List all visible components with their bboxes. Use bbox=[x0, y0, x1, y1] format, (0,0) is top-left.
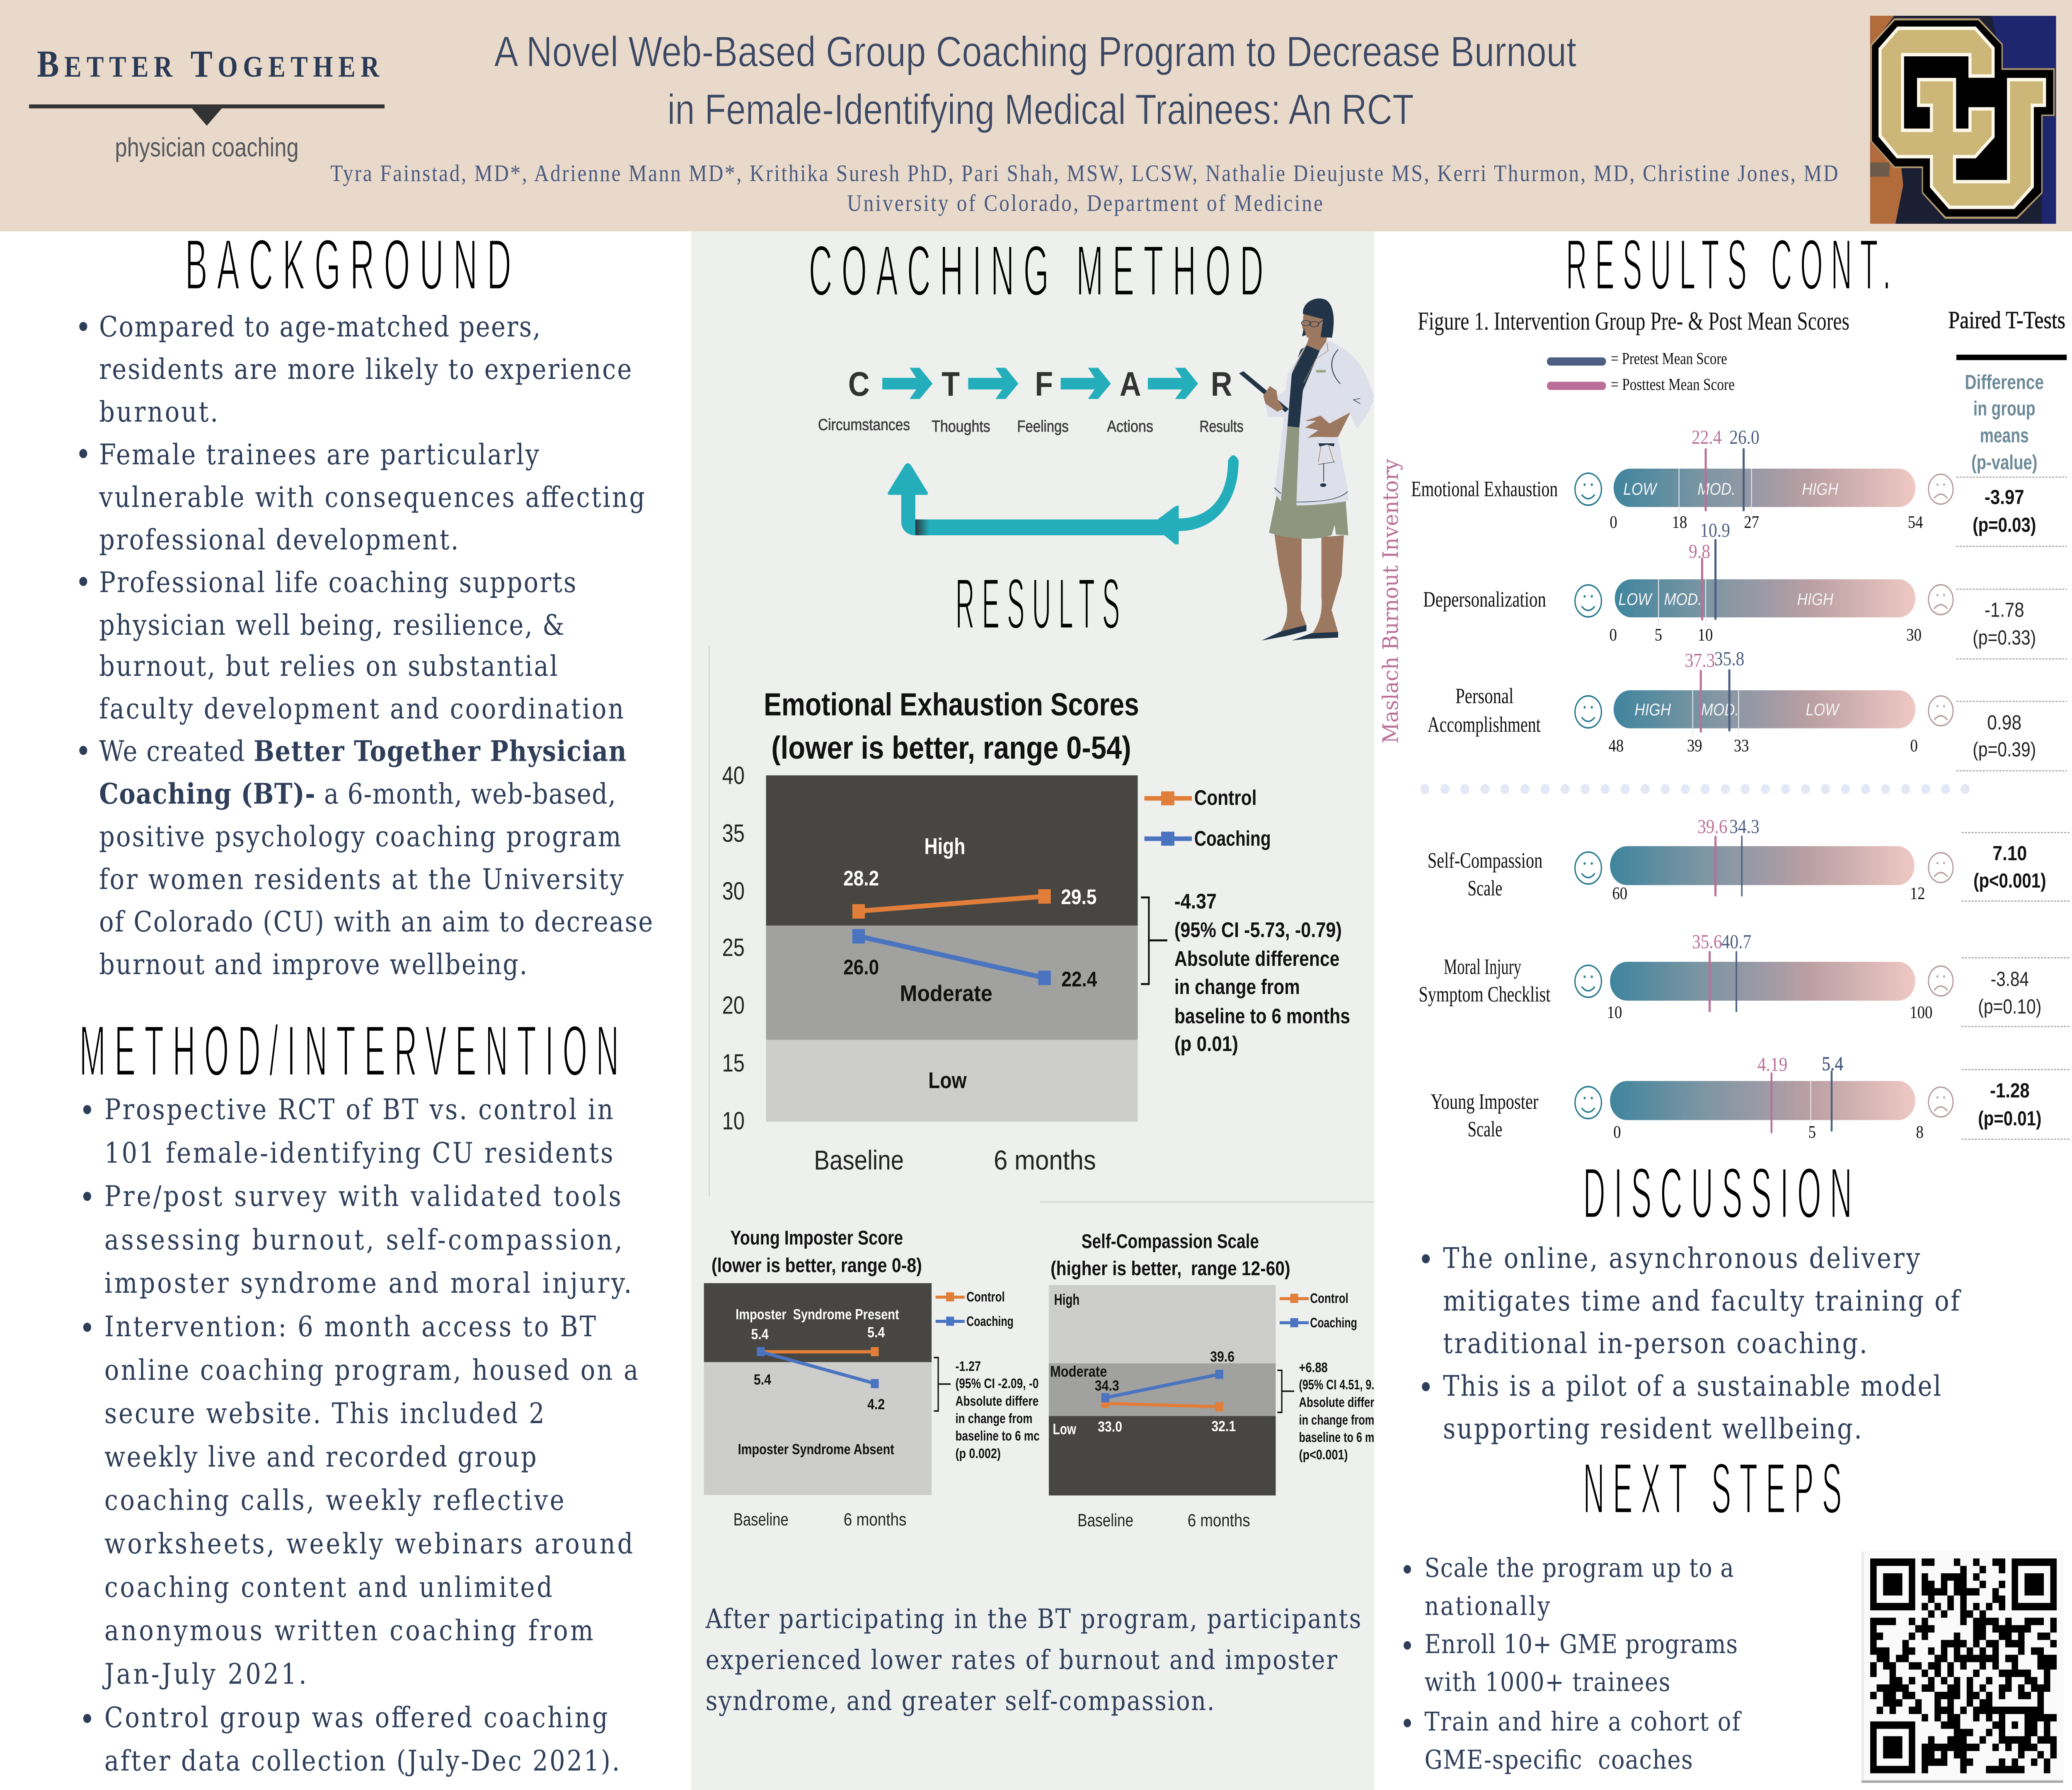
row: young imposter scale: 0 bbox=[1613, 1122, 1621, 1142]
chart title bbox=[712, 1227, 922, 1277]
panel: results cont. bbox=[1378, 225, 2071, 1142]
x axis bbox=[1077, 1511, 1250, 1530]
row: personal accomplishment: 48 bbox=[1609, 736, 1624, 755]
row: personal accomplishment: 0 bbox=[1910, 736, 1918, 755]
background bullet points: vulnerable with consequences affecting bbox=[99, 481, 645, 514]
annotation: (95% CI 4.51, 9. bbox=[1299, 1377, 1374, 1393]
background bullet points: Female trainees are particularly bbox=[99, 438, 539, 471]
annotation: baseline to 6 m bbox=[1299, 1430, 1374, 1445]
band labels: Low bbox=[928, 1067, 967, 1093]
chart title: (lower is better, range 0-8) bbox=[712, 1255, 922, 1277]
method bullet points: coaching calls, weekly reflective bbox=[104, 1484, 564, 1517]
CTFAR letters bbox=[848, 365, 1232, 403]
legend bbox=[936, 1289, 1014, 1329]
y axis: 10 bbox=[722, 1107, 745, 1135]
background bullet points: for women residents at the University bbox=[99, 863, 624, 896]
panel: results charts bbox=[704, 564, 1374, 1717]
row: self-compassion scale: (p<0.001) bbox=[1973, 869, 2046, 892]
CTFAR letters: T bbox=[942, 365, 960, 403]
panel: next steps bbox=[1404, 1449, 2063, 1783]
row: depersonalization: 10 bbox=[1698, 625, 1713, 644]
row: personal accomplishment: MOD. bbox=[1701, 701, 1739, 719]
row: depersonalization: 30 bbox=[1906, 625, 1922, 644]
row: depersonalization: -1.78 bbox=[1985, 598, 2024, 621]
legend: Coaching bbox=[1310, 1315, 1357, 1330]
icon: return loop arrow bbox=[888, 455, 1239, 544]
row: self-compassion scale: 12 bbox=[1910, 884, 1925, 903]
band labels: Imposter Syndrome Absent bbox=[738, 1441, 894, 1457]
annotation bbox=[955, 1358, 1040, 1461]
row: personal accomplishment: 35.8 bbox=[1714, 648, 1744, 670]
row: moral injury symptom checklist: 10 bbox=[1607, 1003, 1622, 1022]
CTFAR labels: Feelings bbox=[1017, 417, 1069, 435]
annotation: in change from bbox=[955, 1411, 1032, 1426]
row: self-compassion scale: 7.10 bbox=[1992, 842, 2027, 865]
row: moral injury symptom checklist: 40.7 bbox=[1721, 931, 1751, 953]
heading: method / intervention: METHOD/INTERVENTION bbox=[79, 1011, 628, 1091]
row: self-compassion scale bbox=[1428, 815, 2046, 903]
method bullet points: worksheets, weekly webinars around bbox=[104, 1528, 633, 1560]
legend: pretest and posttest: = Pretest Mean Score bbox=[1611, 349, 1727, 368]
row: young imposter scale: (p=0.01) bbox=[1978, 1107, 2041, 1130]
side label: Maslach Burnout Inventory: Maslach Burnout Inventory bbox=[1378, 459, 1403, 743]
data labels: 26.0 bbox=[843, 955, 879, 980]
bracket bbox=[934, 1357, 951, 1411]
bands bbox=[766, 775, 1138, 1122]
band labels: High bbox=[1054, 1292, 1080, 1308]
panel: results charts: RESULTS bbox=[955, 564, 1127, 644]
conclusion text: experienced lower rates of burnout and imposter bbox=[706, 1645, 1337, 1676]
chart title: Emotional Exhaustion Scores bbox=[764, 687, 1139, 723]
method bullet points: coaching content and unlimited bbox=[104, 1571, 552, 1604]
CTFAR labels: Actions bbox=[1107, 417, 1153, 435]
row: personal accomplishment: 0.98 bbox=[1987, 711, 2021, 734]
y axis: 20 bbox=[722, 992, 745, 1019]
row: self-compassion scale: 60 bbox=[1612, 884, 1627, 903]
annotation: (p<0.001) bbox=[1299, 1447, 1348, 1463]
annotation: in change from bbox=[1174, 975, 1300, 999]
data labels: 5.4 bbox=[867, 1324, 885, 1340]
row: young imposter scale: 4.19 bbox=[1757, 1053, 1787, 1075]
row: self-compassion scale: 39.6 bbox=[1697, 815, 1728, 837]
y axis: 35 bbox=[722, 820, 745, 847]
CTFAR labels bbox=[818, 416, 1244, 435]
row: emotional exhaustion: Emotional Exhaustion bbox=[1411, 477, 1558, 501]
title bbox=[494, 28, 1576, 133]
row: young imposter scale: Scale bbox=[1467, 1117, 1502, 1141]
row: depersonalization: (p=0.33) bbox=[1973, 626, 2036, 649]
band labels bbox=[900, 833, 992, 1093]
y axis: 30 bbox=[722, 878, 745, 905]
x axis: 6 months bbox=[1188, 1511, 1250, 1530]
row: moral injury symptom checklist bbox=[1418, 931, 2041, 1022]
y axis: 25 bbox=[722, 934, 745, 962]
x axis: Baseline bbox=[1077, 1511, 1133, 1530]
row: emotional exhaustion: 26.0 bbox=[1729, 426, 1760, 448]
row: young imposter scale: Young Imposter bbox=[1431, 1089, 1539, 1114]
annotation: in change from bbox=[1299, 1412, 1374, 1427]
next steps bullet points: Enroll 10+ GME programs bbox=[1425, 1629, 1738, 1659]
column heading: difference in group means: means bbox=[1980, 424, 2029, 447]
heading: background: BACKGROUND bbox=[185, 225, 520, 305]
logo: Better Together physician coaching: B ETTER T OGETHER bbox=[37, 43, 380, 85]
data labels bbox=[1095, 1348, 1236, 1434]
method bullet points: secure website. This included 2 bbox=[104, 1398, 545, 1430]
annotation: (95% CI -5.73, -0.79) bbox=[1174, 918, 1342, 942]
bracket bbox=[1141, 897, 1167, 984]
data labels: 22.4 bbox=[1061, 967, 1097, 991]
band labels bbox=[1050, 1292, 1107, 1438]
annotation: Absolute difference bbox=[1174, 947, 1339, 971]
method bullet points: weekly live and recorded group bbox=[104, 1441, 537, 1473]
row: emotional exhaustion: (p=0.03) bbox=[1973, 513, 2036, 536]
annotation: Absolute differ bbox=[1299, 1395, 1374, 1410]
row: depersonalization: HIGH bbox=[1797, 590, 1834, 609]
authors and affiliation bbox=[330, 160, 1838, 216]
figure title: Figure 1. Intervention Group Pre- & Post Mean Scores bbox=[1418, 307, 1849, 336]
series lines bbox=[852, 889, 1051, 985]
bands bbox=[704, 1283, 932, 1495]
x axis: 6 months bbox=[844, 1510, 907, 1529]
title: in Female-Identifying Medical Trainees: An RCT bbox=[667, 86, 1414, 133]
chart title bbox=[1051, 1231, 1290, 1280]
data labels bbox=[751, 1324, 885, 1412]
legend: Control bbox=[1194, 786, 1257, 810]
next steps bullet points: nationally bbox=[1425, 1591, 1550, 1621]
bands bbox=[1049, 1285, 1276, 1495]
header band bbox=[0, 0, 2072, 231]
band labels: Imposter Syndrome Present bbox=[736, 1306, 899, 1323]
row: personal accomplishment: Personal bbox=[1455, 684, 1513, 708]
legend: Control bbox=[966, 1289, 1005, 1304]
background bullet points: We created Better Together Physician bbox=[99, 735, 626, 768]
heading: coaching method: COACHING METHOD bbox=[809, 231, 1273, 311]
chart title: (lower is better, range 0-54) bbox=[771, 731, 1131, 766]
band labels: High bbox=[925, 833, 965, 859]
authors and affiliation: Tyra Fainstad, MD*, Adrienne Mann MD*, Krithika Suresh PhD, Pari Shah, MSW, LCSW, Nathalie Dieujuste MS, Kerri Thurmon, MD, Christine Jones, MD bbox=[330, 160, 1838, 186]
band labels: Moderate bbox=[1050, 1363, 1107, 1380]
row: depersonalization: MOD. bbox=[1664, 590, 1702, 609]
chart: emotional exhaustion scores bbox=[722, 687, 1350, 1176]
panel: coaching method bbox=[809, 231, 1374, 641]
row: self-compassion scale: Self-Compassion bbox=[1428, 848, 1542, 873]
method bullet points: imposter syndrome and moral injury. bbox=[104, 1267, 632, 1300]
icon: CTFAR forward arrows bbox=[882, 368, 1198, 399]
y axis: 40 bbox=[722, 762, 745, 790]
data labels: 5.4 bbox=[754, 1371, 771, 1388]
row: young imposter scale: 5 bbox=[1808, 1122, 1816, 1142]
row: depersonalization: Depersonalization bbox=[1423, 587, 1546, 612]
University of Colorado CU logo bbox=[1870, 16, 2056, 224]
bracket bbox=[1278, 1370, 1294, 1413]
method bullet points: anonymous written coaching from bbox=[104, 1615, 593, 1647]
discussion bullet points: mitigates time and faculty training of bbox=[1443, 1285, 1961, 1318]
legend: pretest and posttest bbox=[1547, 349, 1735, 394]
row: moral injury symptom checklist: Symptom Checklist bbox=[1418, 982, 1550, 1006]
column heading: difference in group means: Difference bbox=[1965, 370, 2044, 394]
row: personal accomplishment: HIGH bbox=[1634, 701, 1671, 719]
discussion bullet points bbox=[1422, 1242, 1961, 1446]
background bullet points: residents are more likely to experience bbox=[99, 353, 632, 386]
discussion bullet points: This is a pilot of a sustainable model bbox=[1443, 1370, 1941, 1403]
annotation: (95% CI -2.09, -0 bbox=[955, 1376, 1038, 1391]
series lines bbox=[757, 1347, 879, 1388]
row: moral injury symptom checklist: -3.84 bbox=[1991, 967, 2029, 990]
data labels: 32.1 bbox=[1211, 1418, 1236, 1434]
annotation: (p 0.01) bbox=[1174, 1032, 1238, 1056]
chart title: (higher is better, range 12-60) bbox=[1051, 1258, 1290, 1280]
data labels: 33.0 bbox=[1098, 1418, 1122, 1434]
data labels: 5.4 bbox=[751, 1326, 769, 1342]
row: emotional exhaustion: LOW bbox=[1623, 480, 1658, 498]
method bullet points: online coaching program, housed on a bbox=[104, 1354, 638, 1387]
legend: Coaching bbox=[966, 1313, 1014, 1329]
data labels: 34.3 bbox=[1095, 1377, 1119, 1394]
CTFAR letters: R bbox=[1211, 365, 1232, 403]
method bullet points: 101 female-identifying CU residents bbox=[104, 1137, 613, 1170]
background bullet points: of Colorado (CU) with an aim to decrease bbox=[99, 906, 653, 939]
background bullet points: burnout. bbox=[99, 396, 218, 429]
band labels: Moderate bbox=[900, 980, 992, 1006]
title: A Novel Web-Based Group Coaching Program to Decrease Burnout bbox=[494, 28, 1576, 75]
next steps bullet points: Train and hire a cohort of bbox=[1425, 1707, 1742, 1737]
panel: middle column background bbox=[691, 231, 1374, 1790]
band labels bbox=[736, 1306, 899, 1457]
method bullet points: Control group was offered coaching bbox=[104, 1701, 608, 1734]
row: depersonalization: 9.8 bbox=[1689, 540, 1710, 562]
column heading: difference in group means bbox=[1965, 370, 2044, 474]
row: personal accomplishment: 33 bbox=[1734, 736, 1749, 755]
x axis bbox=[733, 1510, 907, 1529]
legend: pretest and posttest: = Posttest Mean Score bbox=[1611, 375, 1735, 394]
method bullet points bbox=[83, 1093, 638, 1778]
row: self-compassion scale: 34.3 bbox=[1729, 815, 1760, 837]
row: depersonalization: 5 bbox=[1655, 625, 1662, 644]
row: emotional exhaustion: 54 bbox=[1908, 513, 1923, 532]
discussion bullet points: The online, asynchronous delivery bbox=[1443, 1242, 1920, 1275]
column heading: difference in group means: (p-value) bbox=[1971, 451, 2037, 474]
chart: self-compassion scale bbox=[1049, 1231, 1374, 1530]
row: moral injury symptom checklist: (p=0.10) bbox=[1978, 995, 2041, 1018]
conclusion text bbox=[705, 1604, 1361, 1717]
method bullet points: after data collection (July-Dec 2021). bbox=[104, 1745, 620, 1778]
method bullet points: Jan-July 2021. bbox=[102, 1658, 307, 1691]
annotation: -1.27 bbox=[955, 1358, 981, 1374]
annotation bbox=[1174, 890, 1350, 1056]
legend bbox=[1280, 1291, 1357, 1330]
next steps bullet points: GME-specific coaches bbox=[1425, 1745, 1693, 1775]
method bullet points: assessing burnout, self-compassion, bbox=[104, 1224, 622, 1257]
annotation: Absolute differe bbox=[955, 1393, 1038, 1409]
logo: Better Together physician coaching: physician coaching bbox=[115, 133, 299, 162]
row: personal accomplishment: 39 bbox=[1687, 736, 1702, 755]
row: personal accomplishment bbox=[1428, 648, 2036, 761]
legend bbox=[1144, 786, 1271, 851]
conclusion text: syndrome, and greater self-compassion. bbox=[706, 1686, 1214, 1717]
background bullet points: burnout, but relies on substantial bbox=[99, 650, 558, 683]
annotation: baseline to 6 months bbox=[1174, 1004, 1350, 1028]
row: personal accomplishment: 37.3 bbox=[1685, 649, 1715, 671]
data labels: 29.5 bbox=[1061, 885, 1097, 909]
row: moral injury symptom checklist: 35.6 bbox=[1692, 931, 1722, 953]
x axis: Baseline bbox=[733, 1510, 789, 1529]
row: moral injury symptom checklist: Moral Injury bbox=[1444, 955, 1521, 979]
row: young imposter scale bbox=[1431, 1052, 2041, 1142]
legend: Coaching bbox=[1194, 827, 1271, 851]
row: moral injury symptom checklist: 100 bbox=[1910, 1003, 1932, 1022]
data labels: 28.2 bbox=[843, 866, 879, 890]
background bullet points: Coaching (BT)- a 6-month, web-based, bbox=[99, 778, 616, 811]
paired t-tests heading: Paired T-Tests bbox=[1949, 307, 2065, 334]
authors and affiliation: University of Colorado, Department of Medicine bbox=[847, 190, 1323, 216]
next steps bullet points: with 1000+ trainees bbox=[1425, 1667, 1670, 1697]
background bullet points: Compared to age-matched peers, bbox=[99, 311, 540, 343]
y axis: 15 bbox=[722, 1050, 745, 1077]
row: young imposter scale: 5.4 bbox=[1822, 1052, 1843, 1075]
row: emotional exhaustion: 22.4 bbox=[1692, 426, 1722, 448]
row: emotional exhaustion: 18 bbox=[1672, 513, 1687, 532]
y axis bbox=[722, 762, 745, 1135]
QR code bbox=[1861, 1551, 2063, 1783]
row: depersonalization: LOW bbox=[1619, 590, 1653, 609]
row: personal accomplishment: (p=0.39) bbox=[1973, 738, 2036, 761]
row: personal accomplishment: LOW bbox=[1806, 701, 1840, 719]
data labels: 4.2 bbox=[867, 1396, 885, 1412]
chart title: Young Imposter Score bbox=[730, 1227, 903, 1249]
CTFAR labels: Thoughts bbox=[932, 417, 990, 435]
row: depersonalization: 0 bbox=[1610, 625, 1617, 644]
legend: Control bbox=[1310, 1291, 1348, 1306]
row: emotional exhaustion: MOD. bbox=[1697, 480, 1736, 498]
background bullet points: professional development. bbox=[99, 524, 459, 556]
panel: background bbox=[79, 225, 653, 981]
method bullet points: Pre/post survey with validated tools bbox=[104, 1180, 621, 1213]
row: depersonalization: 10.9 bbox=[1700, 519, 1730, 541]
CTFAR letters: C bbox=[848, 365, 870, 403]
next steps bullet points: Scale the program up to a bbox=[1425, 1553, 1734, 1583]
illustration: doctor bbox=[1239, 298, 1374, 641]
chart: young imposter score bbox=[704, 1227, 1040, 1529]
row: emotional exhaustion: 27 bbox=[1744, 513, 1759, 532]
background bullet points: physician well being, resilience, & bbox=[99, 609, 564, 642]
annotation: baseline to 6 mc bbox=[955, 1428, 1040, 1444]
band labels: Low bbox=[1053, 1421, 1076, 1438]
CTFAR labels: Circumstances bbox=[818, 416, 910, 434]
row: emotional exhaustion: HIGH bbox=[1802, 480, 1839, 498]
annotation: -4.37 bbox=[1174, 890, 1217, 913]
row: emotional exhaustion: 0 bbox=[1610, 513, 1617, 532]
annotation bbox=[1299, 1360, 1374, 1463]
annotation: (p 0.002) bbox=[955, 1446, 1001, 1461]
conclusion text: After participating in the BT program, participants bbox=[705, 1604, 1361, 1635]
row: personal accomplishment: Accomplishment bbox=[1428, 712, 1541, 737]
column heading: difference in group means: in group bbox=[1973, 397, 2036, 420]
discussion bullet points: traditional in-person coaching. bbox=[1443, 1328, 1867, 1360]
discussion bullet points: supporting resident wellbeing. bbox=[1443, 1413, 1862, 1446]
method bullet points: Prospective RCT of BT vs. control in bbox=[104, 1093, 613, 1126]
method bullet points: Intervention: 6 month access to BT bbox=[104, 1311, 596, 1343]
row: young imposter scale: 8 bbox=[1916, 1122, 1924, 1142]
row: emotional exhaustion bbox=[1411, 426, 2036, 536]
x axis: 6 months bbox=[994, 1145, 1096, 1176]
background bullet points: Professional life coaching supports bbox=[99, 566, 576, 599]
data labels: 39.6 bbox=[1210, 1348, 1234, 1364]
CTFAR letters: A bbox=[1120, 365, 1141, 403]
chart title: Self-Compassion Scale bbox=[1082, 1231, 1259, 1253]
row: self-compassion scale: Scale bbox=[1467, 876, 1502, 900]
chart title bbox=[764, 687, 1139, 766]
background bullet points: faculty development and coordination bbox=[99, 693, 624, 726]
CTFAR letters: F bbox=[1035, 365, 1053, 403]
CTFAR labels: Results bbox=[1199, 417, 1244, 435]
next steps bullet points bbox=[1404, 1553, 1742, 1775]
row: young imposter scale: -1.28 bbox=[1990, 1079, 2030, 1102]
x axis: Baseline bbox=[814, 1145, 904, 1176]
background bullet points bbox=[79, 311, 653, 981]
series lines bbox=[1101, 1370, 1223, 1411]
logo: Better Together physician coaching bbox=[29, 43, 385, 162]
background bullet points: burnout and improve wellbeing. bbox=[99, 948, 527, 981]
row: emotional exhaustion: -3.97 bbox=[1985, 486, 2024, 508]
panel: method / intervention bbox=[79, 1011, 638, 1778]
data labels bbox=[843, 866, 1097, 991]
annotation: +6.88 bbox=[1299, 1360, 1328, 1375]
row: depersonalization bbox=[1423, 519, 2036, 649]
background bullet points: positive psychology coaching program bbox=[99, 821, 621, 854]
panel: discussion bbox=[1422, 1154, 1961, 1446]
x axis bbox=[814, 1145, 1096, 1176]
